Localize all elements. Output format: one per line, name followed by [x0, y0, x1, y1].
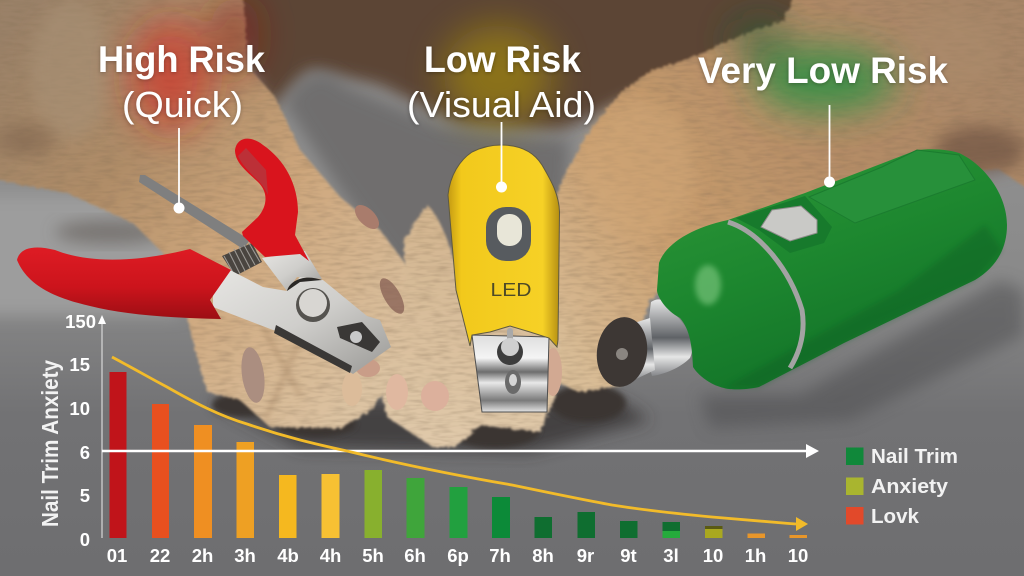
heading: Low Risk — [424, 39, 581, 80]
chrome knob — [628, 318, 655, 380]
x axis labels: 10 — [703, 545, 723, 566]
chrome cutter — [472, 335, 549, 412]
leader line — [828, 105, 830, 182]
leader dot — [174, 202, 184, 214]
x axis labels: 4b — [277, 545, 299, 566]
dark paw pads — [212, 384, 626, 448]
y tick labels: 10 — [69, 398, 90, 419]
heading: Very Low Risk — [698, 50, 948, 91]
x axis labels — [107, 545, 808, 566]
legend: Lovk: Lovk — [871, 506, 920, 528]
switch — [761, 206, 817, 241]
x axis labels: 7h — [489, 545, 511, 566]
switch recess — [736, 196, 832, 253]
leg shadow on table — [55, 220, 165, 244]
y tick labels: 0 — [80, 529, 90, 550]
grey gap between the legs — [285, 73, 570, 300]
bars — [110, 372, 807, 538]
y tick labels: 5 — [80, 485, 90, 506]
legend: Anxiety: Anxiety — [871, 476, 949, 498]
y axis title: Nail Trim Anxiety — [37, 360, 63, 527]
light table at far left — [0, 195, 180, 315]
risk tint: green — [730, 18, 895, 112]
y tick labels: 150 — [65, 311, 96, 332]
x axis labels: 3h — [234, 545, 256, 566]
chrome collar — [645, 299, 692, 376]
jaw pin — [350, 331, 362, 343]
callout: Low Risk — [407, 39, 596, 192]
y tick labels: 6 — [80, 442, 90, 463]
drill shadow on table — [700, 280, 1024, 428]
grinding disc — [592, 314, 652, 390]
rivet — [296, 288, 330, 322]
steel body — [213, 270, 391, 374]
photo: dog legs and paws — [0, 0, 1024, 452]
tool: yellow LED clipper — [448, 145, 560, 412]
x axis labels: 9r — [577, 545, 594, 566]
subheading: (Quick) — [122, 84, 243, 125]
x axis labels: 4h — [320, 545, 341, 566]
LED button — [486, 207, 531, 261]
fur tone patches — [0, 0, 1024, 420]
y axis — [98, 315, 106, 538]
green body — [657, 149, 1007, 389]
upper steel arm — [262, 251, 322, 291]
LED label: LED — [490, 279, 532, 300]
leader line — [500, 122, 502, 187]
body shade — [724, 225, 1002, 388]
yellow body — [448, 145, 560, 347]
leader dot — [496, 182, 507, 192]
handle inner shade — [238, 148, 268, 195]
x axis labels: 2h — [192, 545, 213, 566]
heading: High Risk — [98, 39, 265, 80]
y tick labels — [65, 311, 96, 550]
callout: High Risk — [98, 39, 265, 214]
x axis labels: 3l — [663, 545, 679, 566]
toe nails and pink skin — [238, 201, 562, 411]
body highlight — [695, 265, 721, 305]
left leg and paw fur — [0, 0, 418, 428]
x axis labels: 01 — [107, 545, 127, 566]
silver band — [728, 222, 803, 368]
legend — [846, 446, 958, 528]
callout: Very Low Risk — [698, 50, 948, 188]
guard rod — [139, 175, 250, 249]
dark fur backdrop — [200, 0, 860, 130]
x axis labels: 6p — [447, 545, 469, 566]
tool: red nail clipper — [17, 139, 391, 374]
x axis labels: 6h — [404, 545, 426, 566]
centre paw fur — [380, 205, 560, 447]
top panel — [809, 150, 975, 223]
arm gap shadow — [287, 278, 322, 291]
lower red handle — [17, 247, 231, 319]
legend: Nail Trim: Nail Trim — [871, 446, 958, 468]
yellow trend arrow — [112, 357, 808, 531]
upper red handle — [235, 139, 309, 261]
x axis labels: 8h — [532, 545, 554, 566]
risk tint: red — [130, 0, 260, 130]
subheading: (Visual Aid) — [407, 84, 596, 125]
cutter lever — [497, 328, 523, 394]
risk tint: yellow — [443, 25, 553, 125]
x axis labels: 10 — [788, 545, 808, 566]
spring — [222, 243, 262, 276]
x axis labels: 5h — [362, 545, 384, 566]
x axis labels: 1h — [745, 545, 766, 566]
leader line — [178, 128, 180, 208]
x axis labels: 9t — [620, 545, 637, 566]
paw shadow on table — [210, 400, 650, 452]
leader dot — [824, 176, 835, 188]
right leg and paw fur — [552, 0, 1024, 392]
bar chart: nail trim anxiety — [37, 311, 819, 566]
jaw shadow — [274, 322, 380, 373]
white threshold arrow — [102, 444, 819, 458]
tool: green nail grinder — [592, 149, 1007, 390]
y tick labels: 15 — [69, 354, 90, 375]
x axis labels: 22 — [150, 545, 170, 566]
